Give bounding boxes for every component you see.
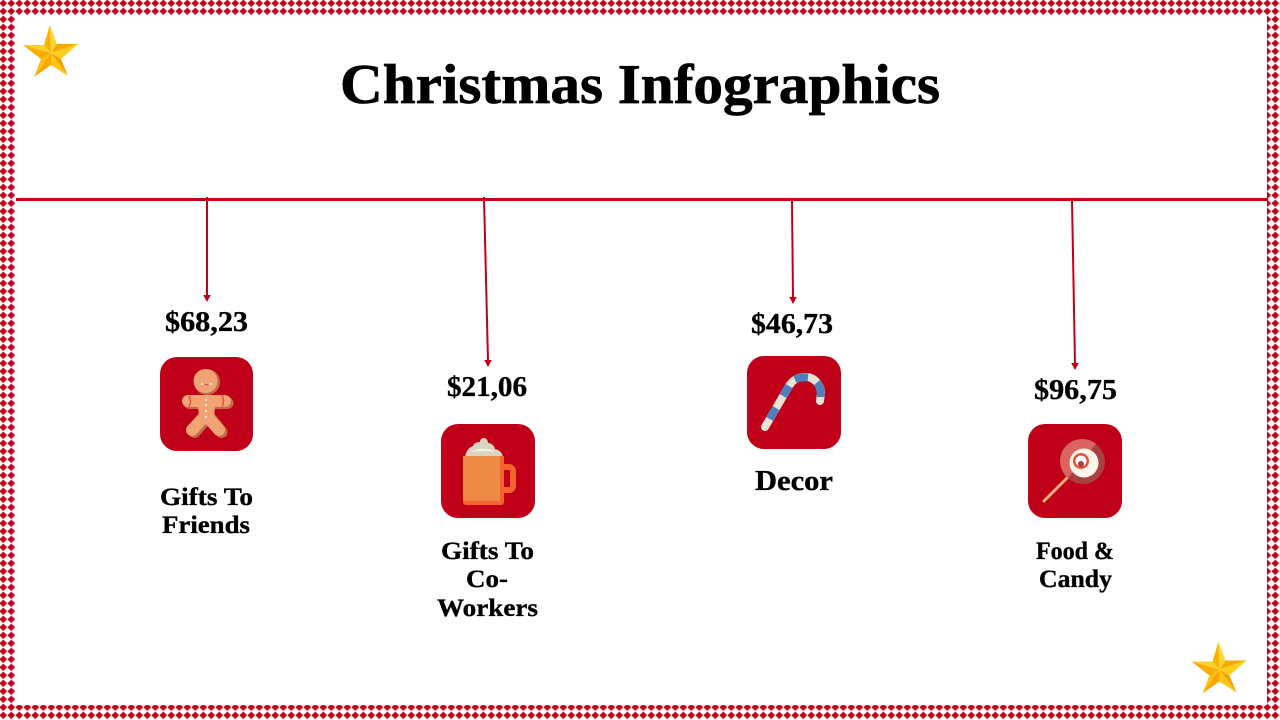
label: food and candy: Food &: [1036, 538, 1114, 565]
timeline line: [16, 198, 1268, 201]
icon: hot cocoa mug: [441, 424, 535, 518]
arrow: food and candy: [1071, 200, 1079, 370]
column: food and candy: [1028, 375, 1122, 593]
arrow: gifts to friends: [203, 197, 211, 302]
label: gifts to friends: [160, 484, 253, 539]
label: food and candy: [1036, 538, 1114, 593]
icon: lollipop: [1028, 424, 1122, 518]
column: decor: [747, 309, 841, 497]
value: $46,73: $46,73: [751, 309, 833, 340]
label: gifts to friends: Gifts To: [160, 484, 253, 511]
icon: candy cane: [747, 356, 841, 449]
arrow: gifts to co-workers: [484, 197, 492, 367]
value: $68,23: $68,23: [165, 307, 248, 338]
label: decor: Decor: [755, 466, 833, 497]
label: food and candy: Candy: [1039, 566, 1113, 593]
value: $21,06: $21,06: [447, 372, 527, 403]
label: gifts to co-workers: Gifts To: [441, 538, 534, 565]
icon: star bottom right: [1192, 642, 1246, 694]
column: gifts to co-workers: [437, 372, 538, 622]
value: $96,75: $96,75: [1034, 375, 1117, 406]
icon: star top left: [23, 25, 78, 77]
label: gifts to co-workers: Co-: [466, 566, 508, 593]
column: gifts to friends: [160, 307, 253, 539]
label: gifts to co-workers: Workers: [437, 595, 538, 622]
icon: gingerbread man: [160, 357, 253, 451]
title: Christmas Infographics: [340, 54, 940, 116]
label: gifts to co-workers: [437, 538, 538, 622]
arrow: decor: [789, 200, 797, 304]
label: gifts to friends: Friends: [162, 512, 250, 539]
